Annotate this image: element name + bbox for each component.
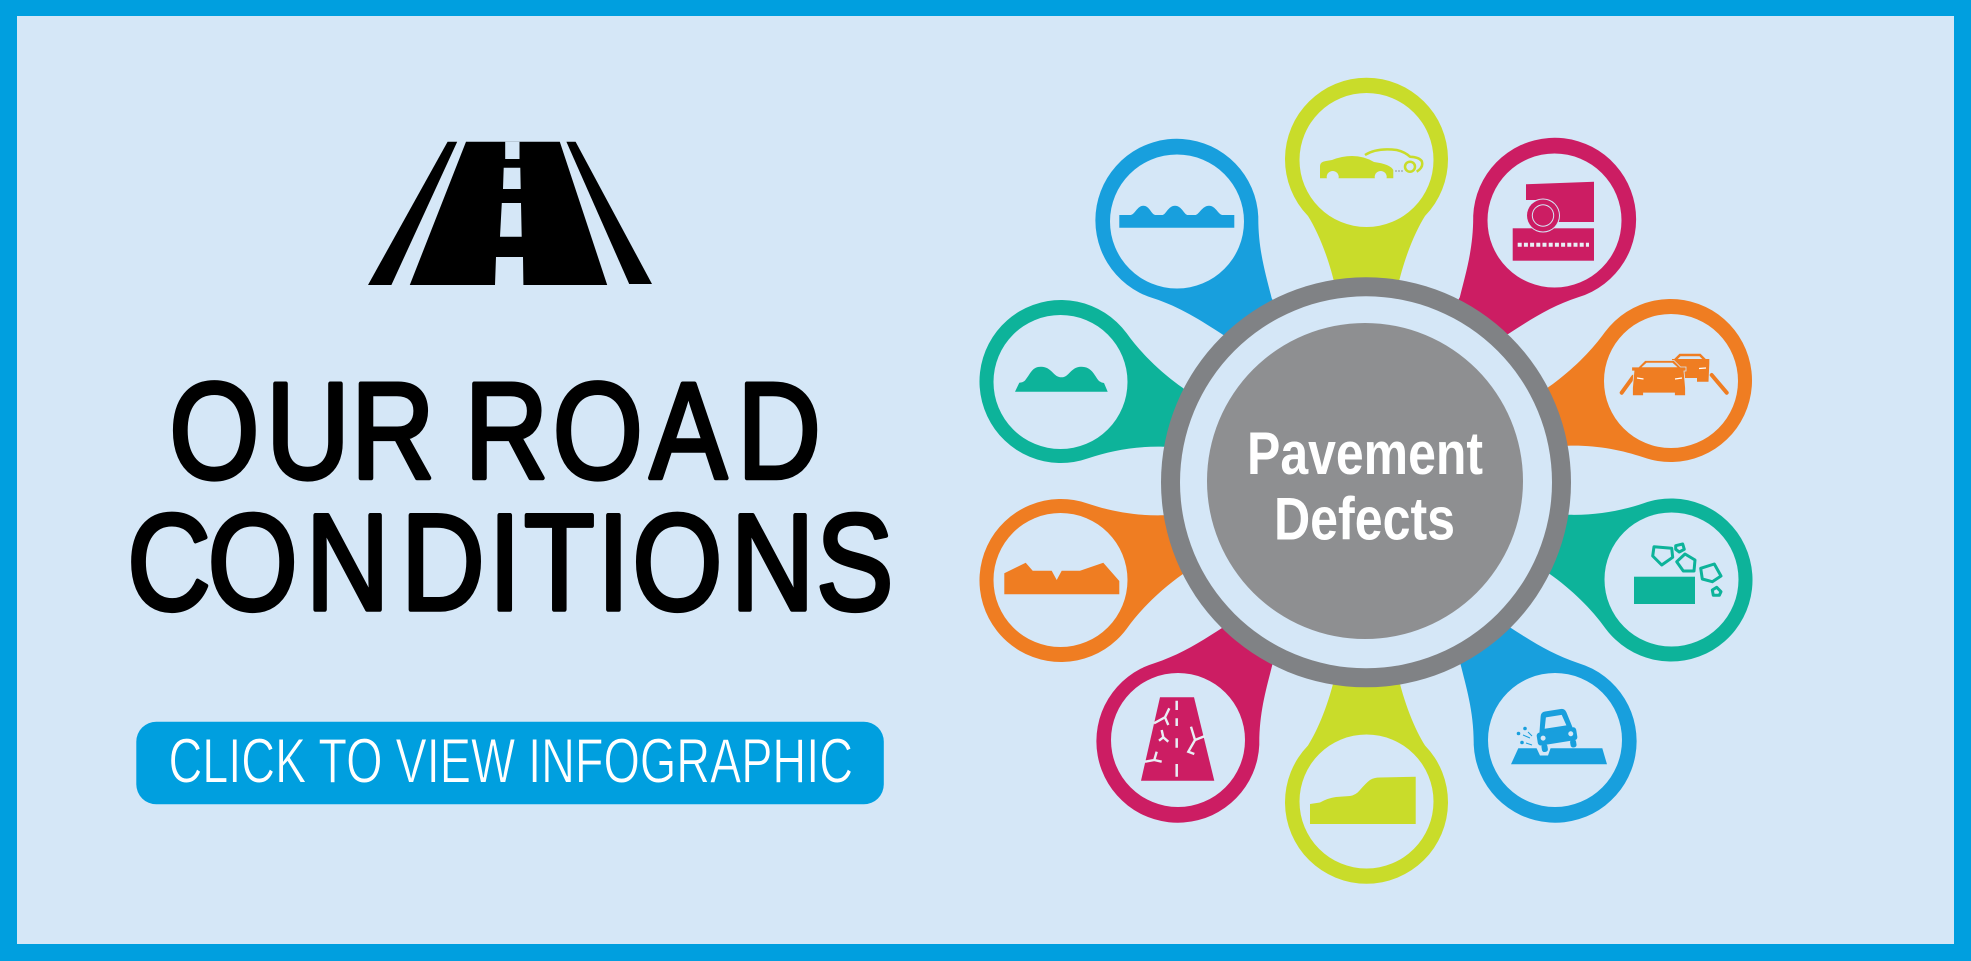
central hub: pavement defects	[1161, 277, 1571, 687]
pin: top-left blue, corrugation	[1095, 139, 1300, 350]
icon: car in pothole	[1511, 707, 1607, 764]
icon: slab with loose stones	[1634, 544, 1721, 604]
title: OUR ROAD	[169, 354, 821, 507]
button: click to view infographic: CLICK TO VIEW INFOGRAPHIC	[168, 726, 853, 796]
icon: cracked road	[1141, 697, 1214, 781]
icon: car and ghost car	[1320, 149, 1422, 183]
icon: corrugated surface	[1119, 206, 1234, 228]
pin: top lime, car following too close	[1285, 78, 1448, 290]
icon: road	[368, 142, 652, 285]
icon: double hump	[1015, 367, 1108, 392]
icon: shoved pavement	[1310, 777, 1416, 824]
title	[127, 354, 893, 639]
pin: right teal, crumbling edge	[1522, 498, 1753, 661]
pin: left teal, bumps	[979, 300, 1210, 463]
pin: right orange, traffic	[1522, 299, 1752, 462]
button: click to view infographic	[136, 722, 884, 804]
hub label: Defects	[1274, 486, 1455, 552]
pin: bottom-right blue, pothole	[1432, 612, 1637, 823]
icon: two cars on a narrowing road	[1622, 355, 1727, 396]
hub label: Pavement	[1247, 420, 1483, 487]
hub label	[1247, 420, 1483, 552]
pin: left orange, broken surface	[979, 499, 1210, 662]
pin: bottom-left pink, cracking	[1096, 612, 1301, 823]
pin: top-right pink, rutting	[1432, 138, 1636, 349]
icon: tyre on rail track	[1513, 182, 1594, 261]
icon: broken pavement profile	[1004, 563, 1119, 594]
pin: bottom lime, shoving	[1285, 672, 1448, 884]
title: CONDITIONS	[127, 485, 893, 639]
